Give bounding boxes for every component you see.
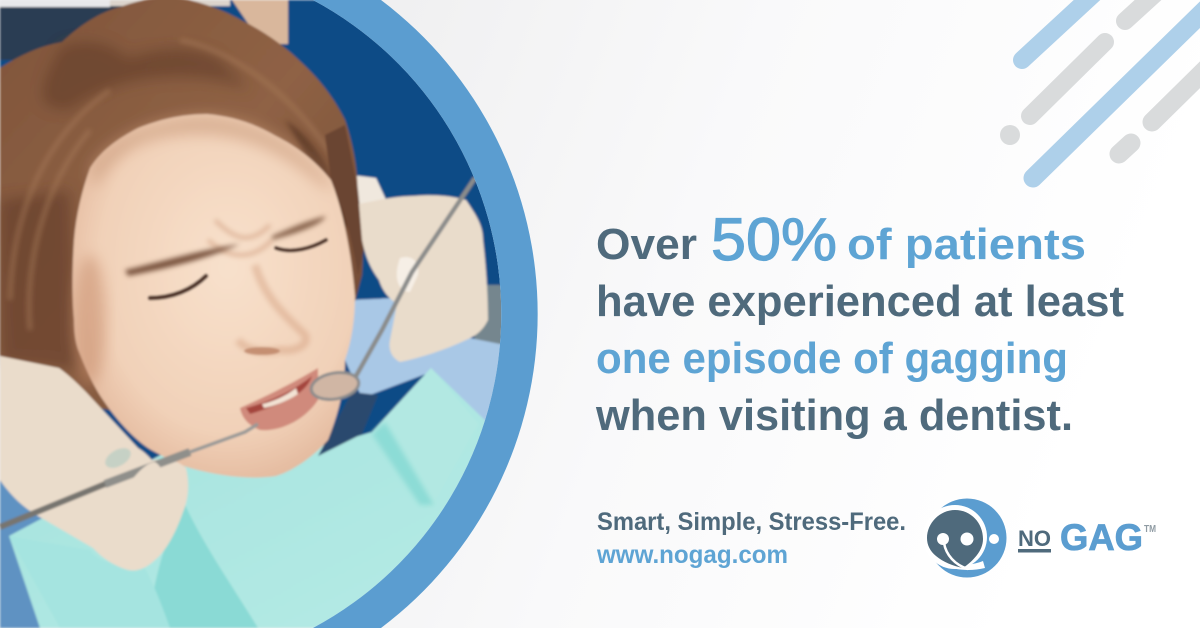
hair — [0, 0, 363, 410]
headline — [595, 206, 1124, 440]
nose — [238, 265, 306, 352]
hair lock over right temple — [325, 125, 364, 275]
cheek shading — [74, 255, 106, 385]
top-left dark backdrop and assistant — [0, 0, 288, 60]
thumb tip — [104, 448, 132, 468]
line 4: when visiting a dentist. — [595, 391, 1073, 440]
right eyebrow — [272, 216, 326, 240]
under chin shadow — [318, 392, 378, 456]
blue gown — [344, 296, 500, 422]
bib — [9, 368, 505, 628]
glove shading — [397, 257, 418, 292]
collar near glove — [355, 174, 387, 205]
brow furrow — [208, 220, 272, 255]
right instrument and mirror — [309, 178, 475, 403]
logo GAG: GAG — [1060, 517, 1143, 558]
line 2: have experienced at least — [596, 277, 1124, 326]
blue shirt bottom left — [0, 480, 42, 628]
nostril shadow — [244, 347, 280, 355]
line 1: Over — [596, 220, 697, 269]
mouth — [240, 368, 318, 430]
left eyebrow — [125, 244, 240, 276]
line 3: one episode of gagging — [596, 334, 1068, 383]
logo underline — [1018, 549, 1051, 552]
logo NO: NO — [1018, 526, 1051, 551]
hair shadow on forehead — [90, 114, 335, 190]
dark blue backdrop — [0, 0, 500, 461]
thumb over instrument — [134, 461, 161, 478]
website: www.nogag.com — [596, 541, 788, 569]
tagline: Smart, Simple, Stress-Free. — [597, 508, 906, 536]
blue circular ring — [313, 0, 538, 628]
logo mark — [923, 498, 1006, 578]
right eye — [276, 240, 326, 250]
left instrument — [0, 424, 258, 527]
left eye — [150, 276, 206, 298]
photo: patient at dentist — [0, 0, 540, 628]
trademark: TM — [1144, 524, 1156, 535]
decorative diagonal stripes — [1000, 0, 1200, 178]
left glove — [0, 356, 188, 571]
face — [72, 114, 355, 478]
of patients: of patients — [847, 220, 1086, 269]
50 percent: 50% — [711, 206, 837, 273]
hair shading: parting and lower left — [0, 40, 350, 370]
right glove — [359, 195, 488, 362]
logo — [923, 498, 1156, 578]
grey background behind glove — [474, 282, 502, 345]
